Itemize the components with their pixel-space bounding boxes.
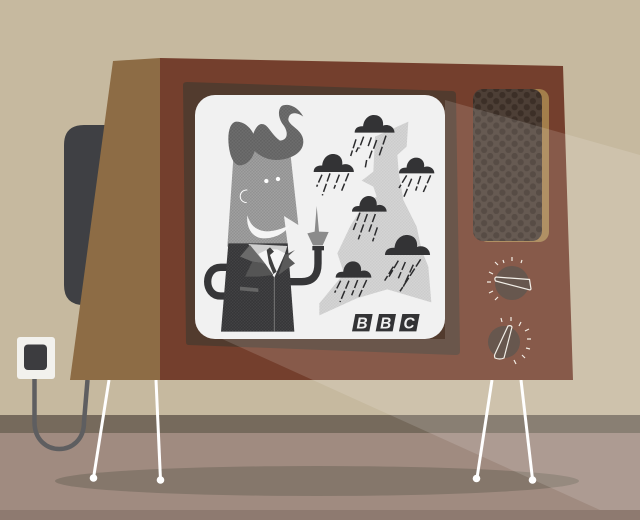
hair back lobe	[251, 105, 303, 160]
front right leg	[477, 380, 492, 478]
BBC logo	[352, 314, 420, 333]
BBC logo: B	[380, 316, 391, 333]
face	[227, 143, 298, 247]
background wall	[0, 0, 640, 415]
wall socket with plug and cord	[17, 337, 88, 449]
television side panel	[70, 58, 160, 380]
tie	[267, 247, 277, 274]
projected light beam	[220, 100, 640, 510]
volume knob	[487, 257, 531, 300]
lapel left lower	[245, 262, 273, 277]
cloud large	[385, 235, 430, 291]
rain	[317, 173, 349, 195]
knob pointer	[495, 277, 531, 290]
right arm	[290, 249, 318, 282]
knob pointer	[494, 326, 512, 359]
ear	[240, 190, 247, 203]
knob base	[495, 266, 529, 300]
pointer arrow	[307, 206, 329, 245]
suit body	[221, 243, 294, 332]
skirting board	[0, 415, 640, 433]
rain	[385, 259, 421, 291]
weather map	[319, 122, 431, 315]
rain	[335, 280, 367, 302]
lapel seam	[273, 277, 276, 332]
knob base	[488, 326, 520, 358]
television back housing	[64, 125, 125, 305]
cloud bottom	[335, 261, 371, 302]
cloud middle	[352, 196, 387, 241]
cloud left	[314, 154, 354, 195]
BBC logo: B	[356, 316, 368, 333]
rain	[351, 136, 386, 167]
screen surround	[183, 82, 460, 355]
hair front lobe	[228, 122, 256, 165]
rain	[353, 213, 377, 241]
pocket	[240, 287, 258, 292]
shirt	[258, 249, 285, 277]
presenter	[208, 105, 329, 332]
cloud right	[399, 158, 434, 197]
left arm handle	[208, 267, 228, 296]
speaker	[473, 89, 549, 242]
lapel right	[278, 250, 295, 275]
rain	[399, 175, 431, 197]
floor shadow under television	[55, 466, 579, 496]
speaker wood edge	[478, 89, 549, 242]
lapel left upper	[240, 245, 265, 263]
television front panel	[160, 58, 573, 380]
television screen	[195, 95, 445, 339]
speaker grille	[473, 89, 542, 241]
eyes	[264, 179, 268, 183]
collar	[248, 244, 287, 277]
plug	[24, 344, 47, 370]
hand cuff	[312, 246, 324, 250]
knob ticks	[501, 317, 531, 364]
knob ticks	[487, 257, 522, 300]
tuning knob	[488, 317, 531, 364]
cloud top	[351, 115, 395, 167]
rear left leg	[156, 380, 160, 480]
smile	[247, 215, 290, 238]
television legs	[90, 380, 536, 484]
power cord	[34, 370, 88, 449]
floor	[0, 433, 640, 510]
floor front band	[0, 510, 640, 520]
socket plate	[17, 337, 55, 379]
rear right leg	[521, 380, 532, 479]
BBC logo: C	[403, 316, 415, 333]
front left leg	[94, 380, 109, 478]
screen background	[195, 95, 445, 339]
